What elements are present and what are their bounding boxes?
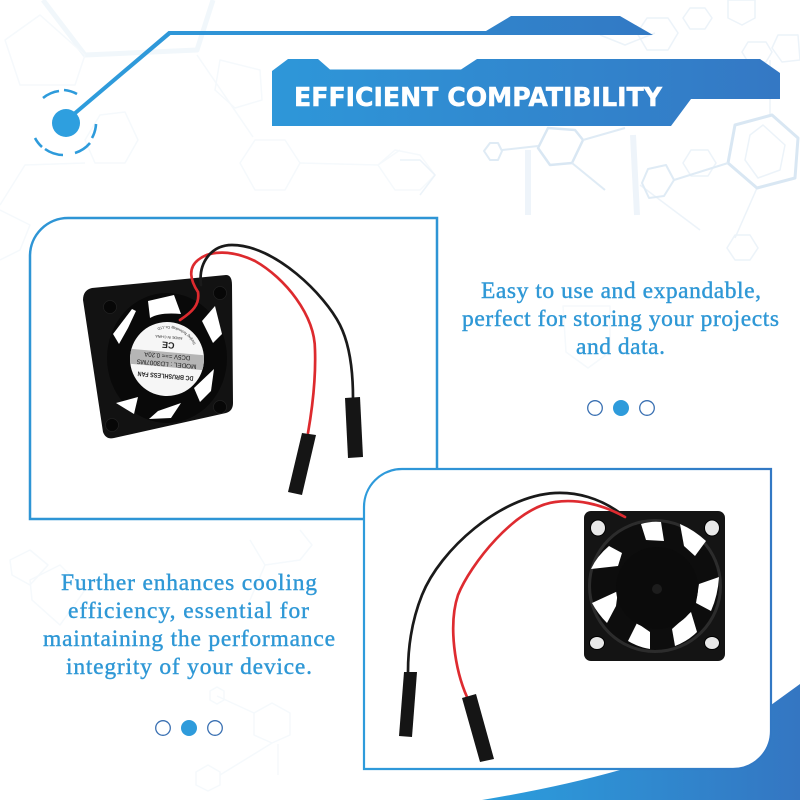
text: second description: efficiency, essential for: [68, 598, 309, 624]
text: first description: and data.: [576, 334, 665, 360]
wires: [408, 493, 625, 697]
connector pins: [399, 672, 494, 762]
text: second description: integrity of your device.: [66, 654, 312, 680]
title text: EFFICIENT COMPATIBILITY: [294, 83, 663, 113]
fan openings: [113, 295, 222, 419]
panel: fan front photo: [28, 216, 438, 520]
hub label: MADE IN CHINA: [155, 334, 183, 340]
text: second description: Further enhances cooling: [61, 570, 317, 596]
pagination dots: first: [588, 400, 654, 416]
pagination dots: second: [156, 720, 222, 736]
fan hub: [616, 547, 698, 629]
text: second description: maintaining the performance: [43, 626, 335, 652]
hub label: MODEL : LD3007MS: [136, 357, 197, 370]
mounting holes: [104, 286, 226, 432]
fan body: [83, 275, 233, 438]
text: first description: perfect for storing your projects: [462, 306, 779, 332]
fan body: [584, 511, 725, 661]
title banner: [272, 59, 780, 126]
hub label: DC BRUSHLESS FAN: [137, 369, 194, 381]
icon: target dot with dashed ring: [35, 90, 96, 155]
wires: [180, 245, 353, 433]
hub label: DC5V === 0.20A: [143, 350, 191, 361]
bottom right corner shape: [482, 684, 800, 800]
text: first description: Easy to use and expandable,: [481, 278, 761, 304]
connector pins: [288, 397, 363, 495]
mounting holes: [590, 520, 720, 650]
hub label: Sunjing Technology Co.,LTD: [158, 326, 196, 345]
hub label: [130, 322, 204, 396]
top decorative bar and connector line: [71, 16, 653, 117]
hub label: CE: [162, 340, 175, 351]
fan openings: [591, 522, 719, 649]
text: second description: [43, 570, 335, 680]
text: first description: [462, 278, 779, 360]
panel: fan back photo: [364, 469, 771, 769]
